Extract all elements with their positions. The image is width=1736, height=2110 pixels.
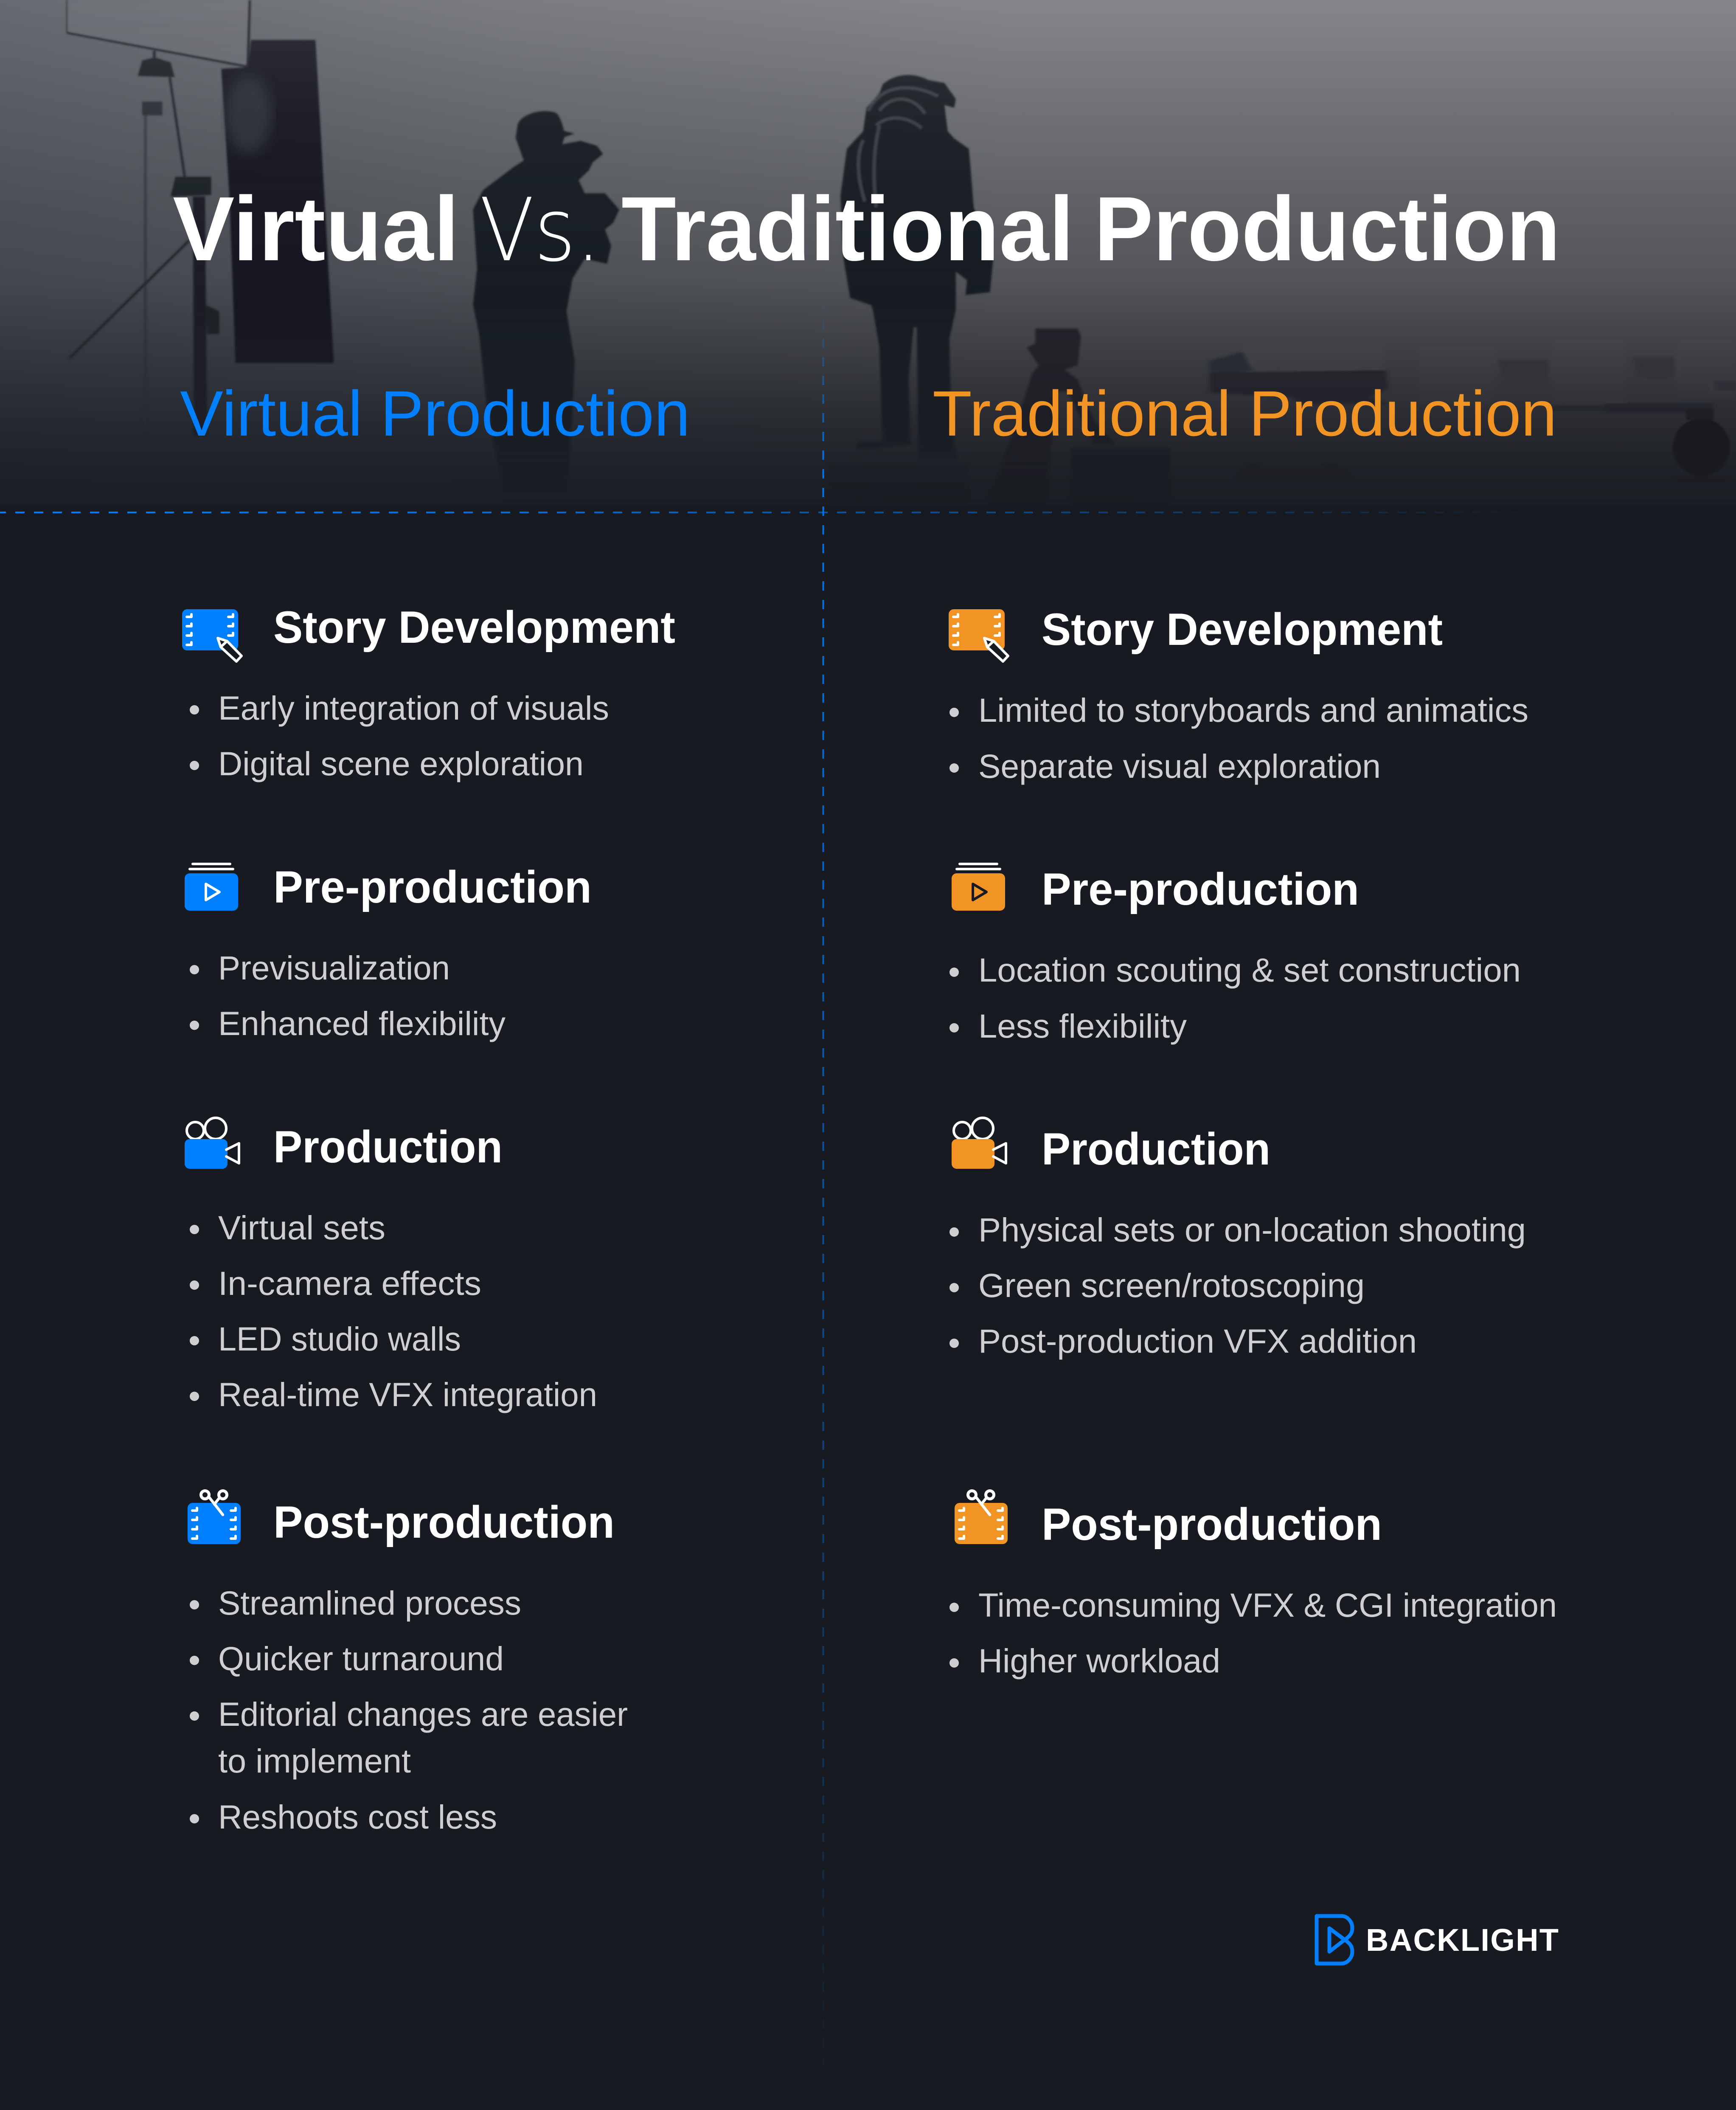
column heading: Virtual Production: Virtual Production (180, 377, 690, 449)
bullet list: Reshoots cost less (218, 1798, 497, 1836)
bullet list: Streamlined process (218, 1584, 521, 1622)
bullet list: Green screen/rotoscoping (978, 1266, 1365, 1304)
section: traditional production (949, 1118, 1526, 1360)
bullet list: Early integration of visuals (218, 689, 609, 727)
heading: Production (273, 1121, 503, 1172)
title: Traditional (621, 177, 1074, 280)
section: virtual pre-production (185, 861, 592, 1042)
bullet list: Previsualization (218, 949, 450, 987)
bullet list: Virtual sets (218, 1209, 385, 1246)
icon: clapper stack with play (185, 864, 238, 911)
bullet list: Location scouting & set construction (978, 951, 1521, 989)
title: Vs. (480, 180, 601, 281)
heading: Pre-production (273, 861, 592, 912)
bullet list: Less flexibility (978, 1007, 1187, 1045)
bullet list: Editorial changes are easier (218, 1695, 628, 1733)
title (173, 177, 1560, 281)
heading: Story Development (1042, 604, 1443, 655)
icon: film with pencil (949, 609, 1008, 661)
left set: frame, flag and stands (67, 0, 334, 436)
icon: film with scissors (955, 1491, 1008, 1544)
cameraman (473, 111, 619, 492)
title: Production (1094, 177, 1560, 280)
bullet list: Limited to storyboards and animatics (978, 691, 1528, 729)
bullet list (949, 1586, 1557, 1680)
bullet list: to implement (218, 1742, 411, 1780)
bullet list: In-camera effects (218, 1264, 481, 1302)
bullet list (949, 951, 1521, 1045)
icon: film with scissors (188, 1491, 241, 1544)
section: traditional pre-production (949, 864, 1521, 1045)
logo: Backlight (1317, 1916, 1559, 1964)
icon: movie camera (185, 1118, 239, 1169)
bullet list (949, 691, 1528, 785)
bullet list (190, 689, 609, 782)
column heading: Traditional Production: Traditional Production (933, 377, 1557, 449)
heading: Pre-production (1042, 864, 1359, 914)
divider: horizontal dashed line (0, 512, 1570, 513)
section: traditional story development (949, 604, 1528, 785)
heading: Post-production (273, 1497, 615, 1547)
icon: B with play triangle (1317, 1916, 1352, 1964)
heading: Post-production (1042, 1499, 1382, 1550)
wordmark: BACKLIGHT (1366, 1922, 1559, 1958)
flag upper glow (225, 76, 272, 153)
bullet list: Separate visual exploration (978, 747, 1381, 785)
panel: virtual column (182, 602, 675, 1836)
icon: clapper stack with play (952, 864, 1005, 911)
heading: Production (1042, 1123, 1270, 1174)
bullet list: Post-production VFX addition (978, 1322, 1417, 1360)
bullet list: LED studio walls (218, 1320, 461, 1358)
section: virtual post-production (188, 1491, 628, 1836)
bullet list (190, 949, 506, 1042)
divider: vertical dashed line (823, 301, 824, 2072)
title: Virtual (173, 177, 459, 280)
bullet list (190, 1209, 597, 1413)
bullet list: Physical sets or on-location shooting (978, 1211, 1526, 1249)
section: virtual production (185, 1118, 597, 1413)
bullet list: Enhanced flexibility (218, 1004, 506, 1042)
bullet list: Quicker turnaround (218, 1640, 504, 1677)
icon: movie camera (952, 1118, 1006, 1169)
bullet list (190, 1584, 628, 1836)
tripod camera and box (1010, 328, 1170, 457)
astronaut (839, 74, 994, 456)
header photo: film set silhouettes (0, 0, 1736, 514)
bullet list: Digital scene exploration (218, 745, 584, 782)
bullet list: Real-time VFX integration (218, 1376, 597, 1413)
panel: traditional column (949, 604, 1557, 1680)
section: traditional post-production (949, 1491, 1557, 1680)
icon: film with pencil (182, 609, 242, 661)
heading: Story Development (273, 602, 675, 653)
bullet list (949, 1211, 1526, 1360)
bullet list: Higher workload (978, 1642, 1220, 1680)
section: virtual story development (182, 602, 675, 782)
bullet list: Time-consuming VFX & CGI integration (978, 1586, 1557, 1624)
distant camp structures (1210, 340, 1736, 478)
